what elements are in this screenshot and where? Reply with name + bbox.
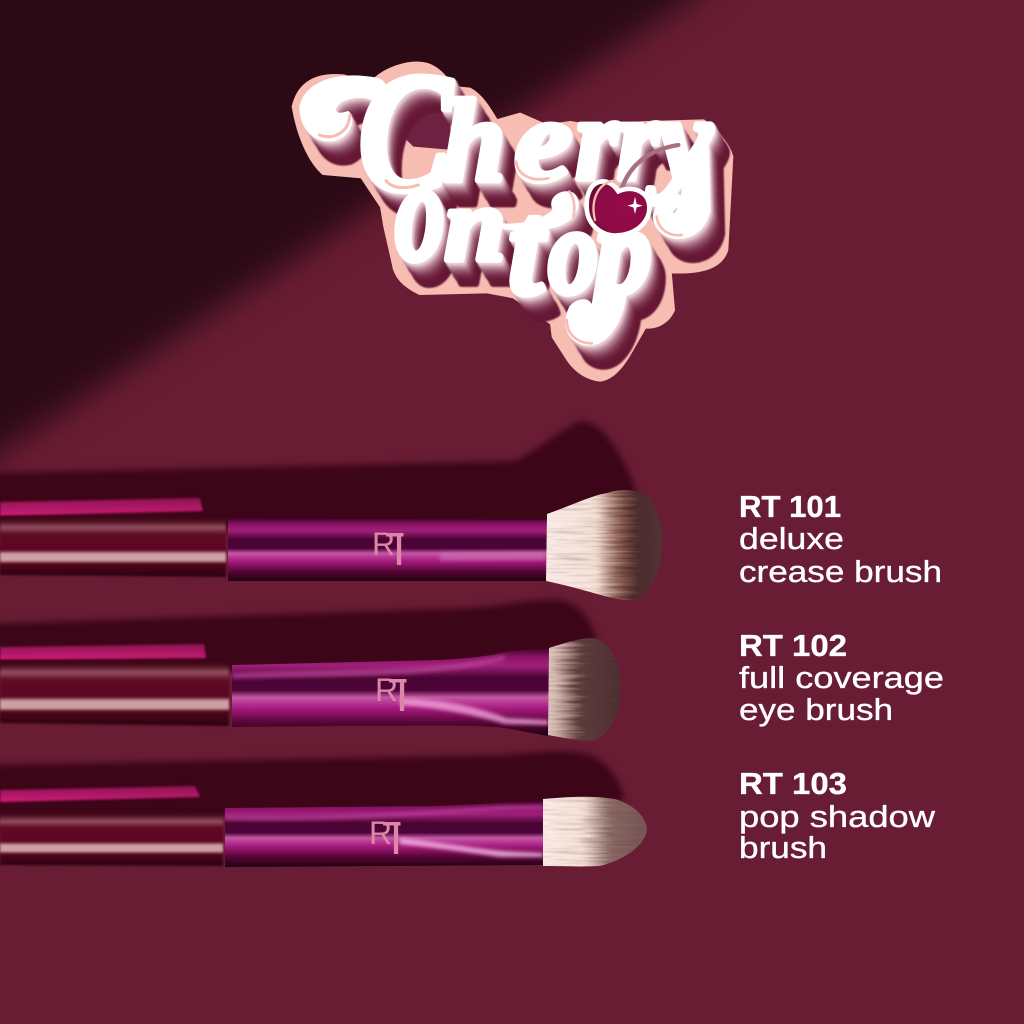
label: RT 103: brush bbox=[739, 830, 827, 865]
label: RT 101: crease brush bbox=[739, 554, 942, 589]
word: on: o bbox=[395, 132, 445, 291]
brush shadows bbox=[0, 421, 637, 820]
brush 2: RT 102 bbox=[0, 638, 621, 741]
swirl of t bar bbox=[497, 192, 578, 230]
bristles bbox=[546, 490, 662, 600]
lettering: y bbox=[646, 75, 713, 204]
sticker outline bbox=[293, 63, 732, 380]
label: RT 103: pop shadow bbox=[739, 799, 936, 834]
label: RT 101: RT 101 bbox=[739, 489, 841, 524]
lettering: h bbox=[443, 77, 505, 206]
label: RT 103: RT 103 bbox=[739, 766, 847, 801]
lettering: o bbox=[548, 183, 598, 320]
shadow: brush 1 bbox=[0, 421, 637, 530]
swirl accents bbox=[319, 115, 682, 343]
lettering: p bbox=[587, 183, 652, 320]
shaded counter of C bbox=[397, 90, 453, 150]
specular highlights bbox=[232, 655, 506, 679]
cherry icon bbox=[587, 145, 678, 236]
product labels bbox=[739, 489, 944, 865]
lettering: e bbox=[515, 77, 572, 206]
label: RT 102 bbox=[739, 628, 944, 727]
specular highlights bbox=[225, 805, 543, 820]
bristles bbox=[548, 638, 621, 741]
title sticker: Cherry on top bbox=[293, 38, 732, 380]
label: RT 101: deluxe bbox=[739, 521, 844, 556]
brush 3: RT 103 bbox=[0, 784, 647, 867]
swirl of p bbox=[566, 283, 627, 345]
logo: R bbox=[375, 672, 398, 708]
logo: R bbox=[372, 526, 395, 562]
stem and swirl of y bbox=[653, 137, 710, 238]
ferrule bbox=[225, 801, 543, 867]
label: RT 102: RT 102 bbox=[739, 628, 847, 663]
logo: R bbox=[369, 815, 392, 851]
label: RT 102: full coverage bbox=[739, 660, 944, 695]
specular highlight bbox=[440, 552, 545, 561]
stem bbox=[621, 145, 678, 192]
lettering: n bbox=[445, 168, 505, 282]
logo bbox=[372, 822, 400, 854]
word: top: t bbox=[508, 174, 547, 322]
label: RT 101 bbox=[739, 489, 942, 589]
handle bbox=[0, 660, 229, 726]
diagonal dark shadow panel bbox=[0, 0, 760, 490]
word: Cherry: C bbox=[358, 38, 453, 226]
highlight bbox=[594, 181, 613, 220]
label: RT 103 bbox=[739, 766, 936, 865]
ferrule bbox=[228, 518, 548, 581]
handle bbox=[0, 811, 223, 866]
lettering: r bbox=[617, 75, 660, 204]
lettering bbox=[300, 38, 713, 345]
ferrule bbox=[232, 648, 549, 736]
sparkle bbox=[627, 197, 643, 214]
logo: T bbox=[382, 812, 410, 864]
reflection strip bbox=[0, 644, 206, 660]
logo: T bbox=[388, 669, 416, 721]
reflection strip bbox=[0, 498, 203, 516]
reflection strip bbox=[0, 786, 200, 802]
swirl of C bbox=[300, 76, 385, 141]
label: RT 102: eye brush bbox=[739, 692, 893, 727]
shadow: brush 3 bbox=[0, 751, 625, 820]
bristles bbox=[543, 796, 647, 866]
fruit bbox=[587, 181, 649, 236]
shadow: brush 2 bbox=[0, 600, 597, 672]
handle bbox=[0, 516, 226, 577]
logo bbox=[378, 678, 406, 711]
brush 1: RT 101 bbox=[0, 490, 662, 600]
logo bbox=[374, 532, 404, 565]
lettering: r bbox=[576, 75, 619, 204]
logo: T bbox=[385, 523, 413, 575]
